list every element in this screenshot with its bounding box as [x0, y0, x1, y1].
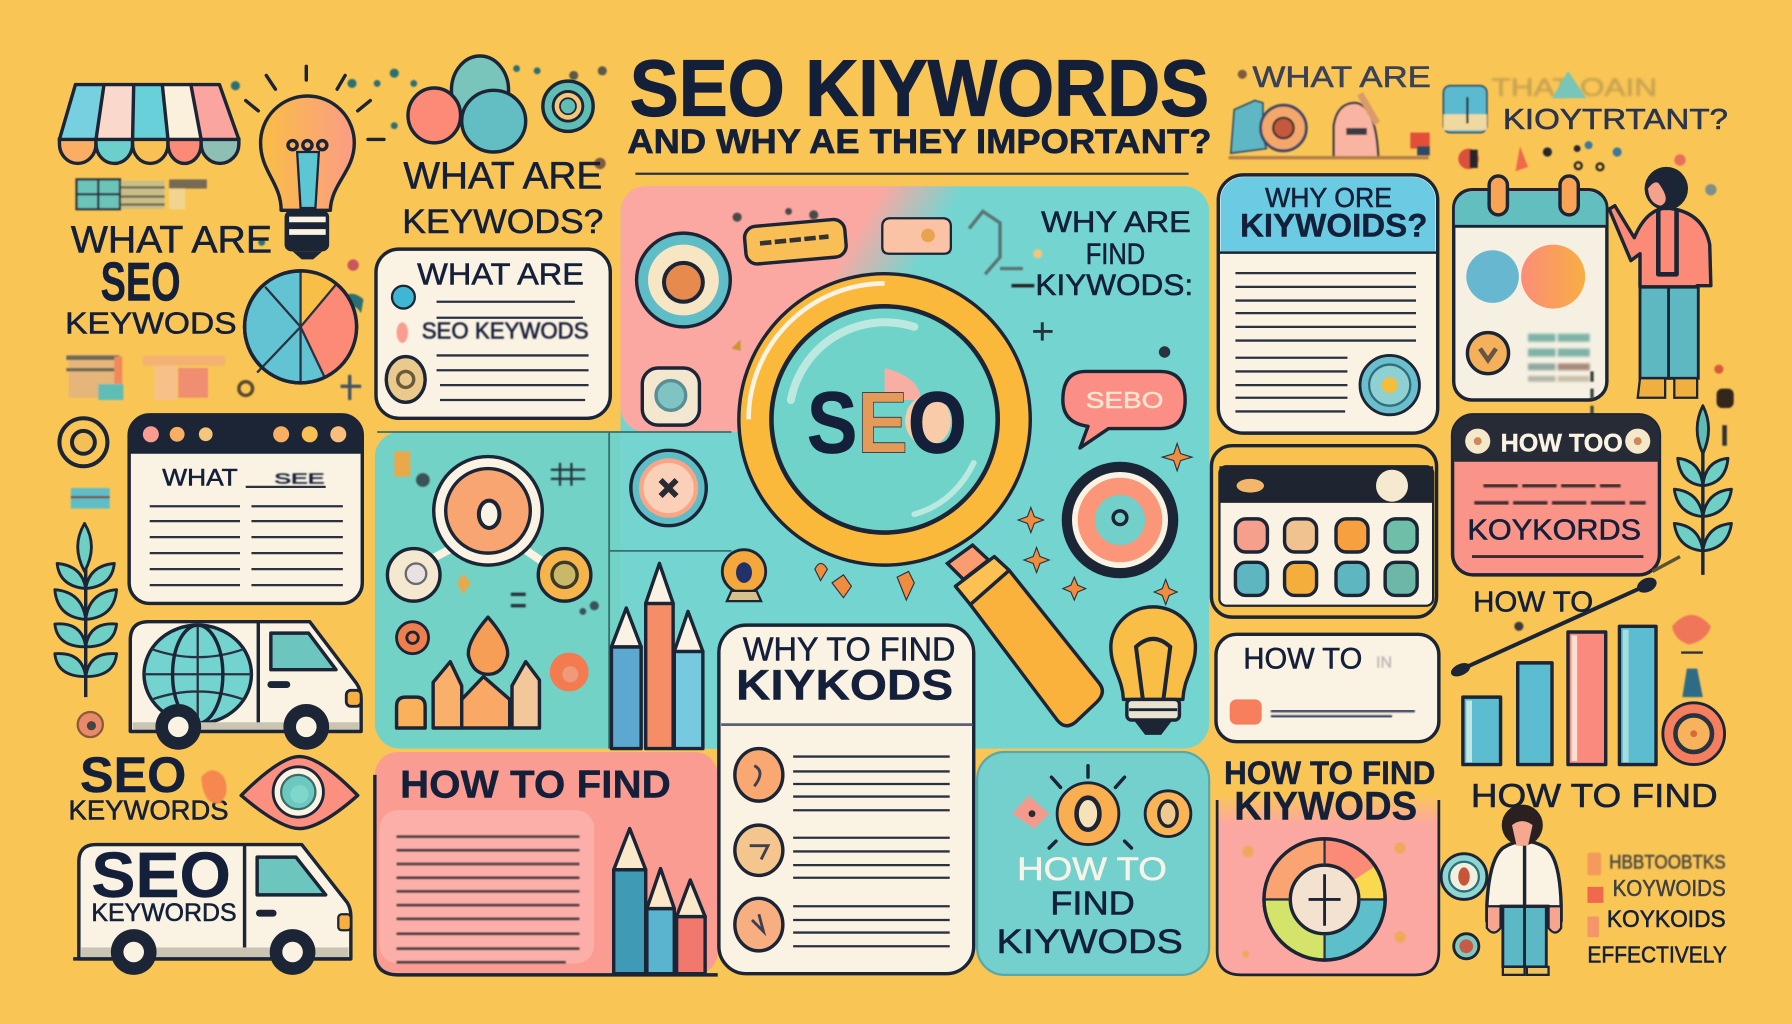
icon: ring target left: [59, 418, 107, 466]
panel: how to window: KOYKORDS: [1467, 514, 1641, 546]
keyword list: KOYWOIDS: [1613, 875, 1726, 901]
why are find keywords text: WHY ARE: [1041, 206, 1191, 239]
keyword list: [1587, 852, 1727, 967]
keyword list: HBBTOOBTKS: [1609, 852, 1726, 874]
how to find label: HOW TO FIND: [1471, 778, 1718, 815]
panel: center teal background: [375, 186, 1209, 749]
title: SEO KIYWORDS: [630, 43, 1209, 132]
icon: delivery truck with globe: [130, 622, 361, 750]
panel: why to find keywords card: WHY TO FIND: [743, 632, 955, 669]
icon: light bulb: [246, 66, 384, 259]
scattered dots near bulb: [231, 65, 607, 313]
panel: how to window: [1453, 415, 1659, 575]
blue doc icon: [1443, 86, 1487, 133]
icon: ring target: [543, 81, 593, 131]
seo lens text: SEO: [807, 375, 967, 472]
small orange badge: [722, 550, 766, 601]
panel: how to window: HOW TOO: [1501, 429, 1623, 457]
what are keywords heading: [402, 155, 603, 241]
top right what are heading: WHAT ARE: [1253, 61, 1431, 94]
left text: what are seo keywords: KEYWODS: [65, 306, 237, 341]
donut chart: [1264, 839, 1385, 960]
pencil group: [614, 829, 705, 974]
figure: standing person: [1487, 805, 1561, 975]
icon: seo delivery truck: SEO: [91, 839, 231, 911]
icon: small x target: [631, 450, 706, 526]
confetti dots: [1458, 141, 1717, 195]
panel: browser window: [129, 415, 362, 603]
seo keywords label: SEO: [80, 746, 186, 803]
panel: why keywords card: WHY ORE: [1265, 182, 1392, 213]
keyword list: EFFECTIVELY: [1587, 941, 1727, 967]
pink panel icons: [637, 208, 951, 425]
icon: right plant: [1674, 406, 1731, 575]
why are find keywords text: FIND: [1086, 238, 1145, 271]
faded upper heading: THAT OAIN: [1491, 74, 1657, 102]
why are find keywords text: [1035, 206, 1193, 302]
plus and blurred bar: [1033, 322, 1189, 358]
how to label: HOW TO: [1473, 586, 1593, 618]
pencils: [611, 563, 703, 749]
seo keywords label: [69, 746, 229, 825]
panel: how to find keywords pink: [1217, 755, 1439, 975]
blurred icon block: [66, 354, 361, 400]
icon: spiral target: [1441, 854, 1487, 899]
blurred sketch icon: [969, 211, 1042, 286]
panel: how to find keywords teal: FIND: [1050, 885, 1135, 922]
pie chart: [245, 271, 357, 383]
panel: why keywords card: KIYWOIDS?: [1240, 208, 1427, 244]
what are keywords heading: KEYWODS?: [402, 203, 603, 241]
panel: how to find pink: [375, 752, 718, 975]
panel: why to find keywords card: [719, 625, 974, 974]
blurred icon strip: [77, 179, 207, 209]
panel: how to card: [1216, 634, 1439, 742]
node diagram: [387, 455, 591, 601]
seo keywords label: KEYWORDS: [69, 794, 229, 825]
panel: what are seo keywords card: [376, 249, 610, 418]
sparkles: [815, 443, 1192, 640]
left text: what are seo keywords: [65, 219, 272, 341]
bar chart with arrow: [1449, 557, 1680, 765]
icon: seo delivery truck: KEYWORDS: [91, 899, 237, 927]
keyword important text: KIOYTRTANT?: [1503, 104, 1728, 136]
panel: browser window: WHAT: [162, 465, 238, 492]
speech bubble: SEBO: [1086, 387, 1163, 413]
panel: how to card: IN: [1376, 654, 1392, 671]
panel: browser window: SEE: [274, 471, 325, 487]
panel: how to find keywords teal: KIYWODS: [997, 923, 1183, 961]
panel: how to find keywords teal: [977, 752, 1209, 975]
small blue block: [71, 488, 110, 509]
panel: why to find keywords card: KIYKODS: [736, 661, 953, 708]
icon: magnifying glass: [737, 272, 1102, 726]
small orange dot: [78, 712, 103, 737]
handle: [955, 557, 1102, 726]
icon: shop awning: [59, 85, 239, 163]
figure: person pointing: [1609, 167, 1711, 398]
title: [627, 43, 1211, 174]
icon: seo delivery truck: [73, 839, 351, 975]
panel: how to find pink: HOW TO FIND: [400, 764, 671, 807]
panel: how to card: HOW TO: [1243, 643, 1362, 676]
icon: left plant: [55, 523, 117, 697]
left text: what are seo keywords: WHAT ARE: [71, 219, 272, 261]
panel: app key grid: [1211, 446, 1437, 617]
why are find keywords text: KIYWODS:: [1035, 269, 1193, 302]
icon: colored balls: [408, 56, 526, 152]
left text: what are seo keywords: SEO: [101, 251, 181, 313]
what are keywords heading: WHAT ARE: [403, 155, 602, 197]
panel: what are seo keywords card: SEO KEYWODS: [422, 317, 589, 343]
panel: how to find keywords pink: HOW TO FIND: [1224, 755, 1435, 791]
title: AND WHY AE THEY IMPORTANT?: [627, 123, 1211, 161]
icon: coral target: [1663, 703, 1725, 765]
panel: calendar: [1454, 176, 1607, 400]
bar chart side icons: [1514, 615, 1711, 697]
icon: eye: [241, 757, 358, 829]
side dots right: [1592, 365, 1734, 446]
icon: small yellow bulb: [1111, 607, 1195, 735]
spike chart with flame: [397, 617, 589, 728]
panel: how to find keywords pink: KIYWODS: [1234, 784, 1417, 828]
keyword list: KOYKOIDS: [1607, 906, 1726, 933]
teal panel small marks: [394, 451, 599, 615]
handle neck: [947, 545, 989, 579]
panel: what are seo keywords card: WHAT ARE: [417, 257, 584, 292]
small target: [1454, 934, 1479, 959]
panel: why keywords card: [1218, 175, 1438, 433]
speech bubble: [1063, 371, 1185, 448]
icon: right target: [1062, 462, 1178, 578]
blurred icons top right: [1229, 94, 1430, 158]
panel: how to find keywords teal: HOW TO: [1017, 851, 1167, 887]
